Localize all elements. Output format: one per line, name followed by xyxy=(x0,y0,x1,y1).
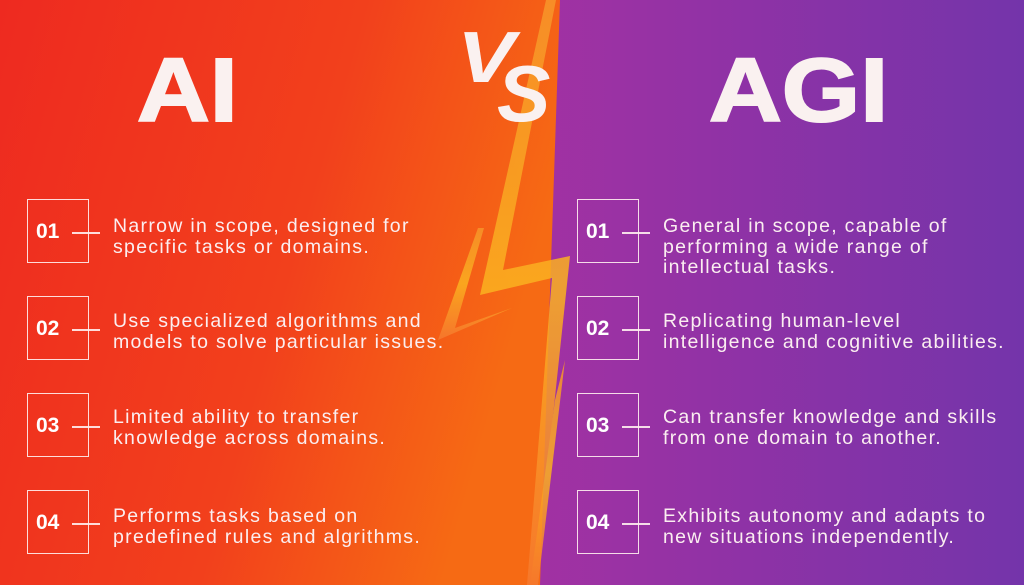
title: AI: AI xyxy=(137,41,238,141)
AGI item 01: General in scope, capable of xyxy=(663,215,948,237)
AGI item 01: performing a wide range of xyxy=(663,236,929,258)
AGI list: intellectual tasks. xyxy=(663,256,836,278)
AI item 04 xyxy=(27,490,421,554)
AGI item 02: Replicating human-level xyxy=(663,310,901,332)
AGI item 01 xyxy=(577,199,948,278)
AGI item 03: Can transfer knowledge and skills xyxy=(663,406,997,428)
AGI item 02: intelligence and cognitive abilities. xyxy=(663,330,1005,352)
VS xyxy=(457,18,550,138)
AI item 01: 01 xyxy=(36,220,59,243)
AI item 03: knowledge across domains. xyxy=(113,426,386,448)
AGI item 01: 01 xyxy=(586,220,609,243)
AI item 04: Performs tasks based on xyxy=(113,505,359,527)
AI item 01: Narrow in scope, designed for xyxy=(113,215,410,237)
AI item 04: predefined rules and algrithms. xyxy=(113,526,421,548)
AI item 02 xyxy=(27,296,444,360)
AI item 03: Limited ability to transfer xyxy=(113,406,359,428)
AI item 04: 04 xyxy=(36,511,59,534)
lightning bolt xyxy=(438,0,570,585)
VS: V xyxy=(457,18,515,98)
AI list xyxy=(27,199,444,554)
AGI item 03 xyxy=(577,393,997,457)
AGI item 04: 04 xyxy=(586,511,609,534)
AGI item 03: 03 xyxy=(586,414,609,437)
AI item 03: 03 xyxy=(36,414,59,437)
AGI item 04: new situations independently. xyxy=(663,526,955,548)
AI item 01: specific tasks or domains. xyxy=(113,236,370,258)
VS: S xyxy=(497,49,550,138)
AGI list xyxy=(577,199,1005,554)
AGI item 02: 02 xyxy=(586,317,609,340)
title: AGI: AGI xyxy=(709,41,888,141)
AGI item 04: Exhibits autonomy and adapts to xyxy=(663,505,986,527)
AI item 02: 02 xyxy=(36,317,59,340)
AGI item 02 xyxy=(577,296,1005,360)
AI item 02: models to solve particular issues. xyxy=(113,330,444,352)
AI item 03 xyxy=(27,393,386,457)
AI item 01 xyxy=(27,199,410,263)
AGI item 03: from one domain to another. xyxy=(663,426,942,448)
AGI item 04 xyxy=(577,490,986,554)
AI item 02: Use specialized algorithms and xyxy=(113,310,422,332)
